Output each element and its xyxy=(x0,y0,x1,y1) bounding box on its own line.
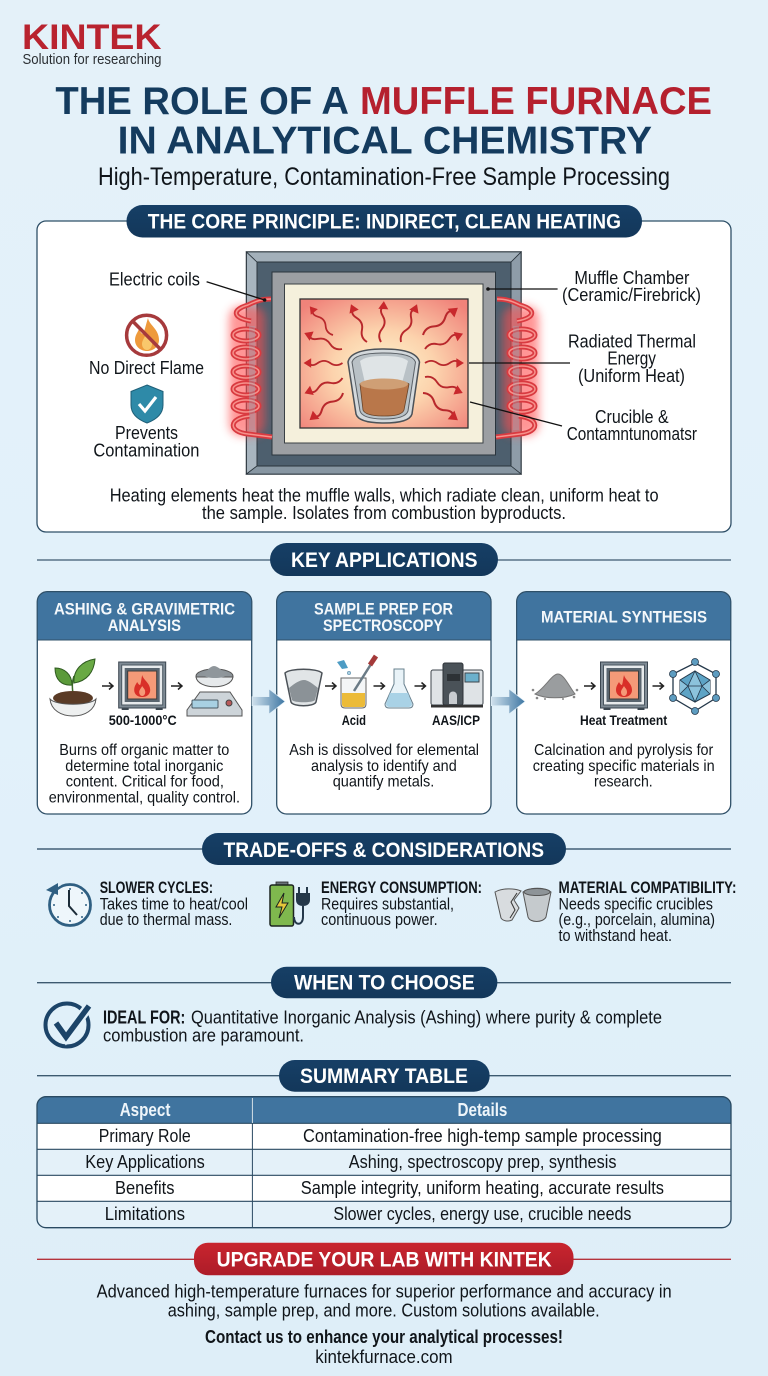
table row: limitations: Slower cycles, energy use, crucible needs xyxy=(333,1204,631,1224)
table row: primary role: Primary Role xyxy=(99,1126,191,1146)
heading: summary table xyxy=(37,1060,731,1092)
label: heat treatment: Heat Treatment xyxy=(580,712,668,728)
label: radiated thermal energy: (Uniform Heat) xyxy=(578,366,685,386)
icon: no direct flame xyxy=(127,315,167,355)
text: material synthesis description: research. xyxy=(594,774,653,791)
label: radiated thermal energy: Energy xyxy=(607,348,656,368)
arrow: step xyxy=(652,682,664,690)
icon: crucible with sample xyxy=(348,349,420,423)
icon: left heating coil xyxy=(233,299,272,437)
text: ashing description: environmental, quality control. xyxy=(49,790,240,807)
text: energy consumption xyxy=(321,878,482,929)
trade-off: material compatibility xyxy=(495,878,736,945)
table row: limitations: Limitations xyxy=(105,1204,185,1224)
heading: trade-offs and considerations: TRADE-OFFS & CONSIDERATIONS xyxy=(224,838,544,862)
table row: primary role: Contamination-free high-temp sample processing xyxy=(303,1126,662,1146)
trade-off: energy consumption xyxy=(270,878,482,929)
text: ideal for: combustion are paramount. xyxy=(103,1026,304,1046)
text: ashing description: content. Critical for food, xyxy=(66,774,224,791)
label: prevents contamination: Contamination xyxy=(93,440,199,460)
label: AAS/ICP: AAS/ICP xyxy=(432,712,480,728)
icon: plant in bowl xyxy=(50,659,96,716)
panel: ashing and gravimetric analysis xyxy=(37,592,252,814)
text: material compatibility: (e.g., porcelain, alumina) xyxy=(558,910,715,929)
title: IN ANALYTICAL CHEMISTRY xyxy=(118,120,652,162)
heading: when to choose: WHEN TO CHOOSE xyxy=(294,970,475,994)
arrow: step xyxy=(414,682,426,690)
text: slower cycles: due to thermal mass. xyxy=(100,910,232,929)
heading: the core principle xyxy=(126,205,642,238)
table row: benefits xyxy=(115,1178,664,1198)
label: crucible: Contamntunomatsr xyxy=(567,424,697,444)
arrow: step xyxy=(374,682,384,690)
label: prevents contamination: Prevents xyxy=(115,423,178,443)
text: slower cycles: Takes time to heat/cool xyxy=(100,894,248,913)
icon: AAS/ICP instrument xyxy=(431,663,483,708)
arrows: radiated heat xyxy=(302,301,465,425)
label: prevents contamination xyxy=(93,423,199,460)
label: no direct flame: No Direct Flame xyxy=(89,358,204,378)
title: THE ROLE OF A xyxy=(55,80,349,123)
card header: material synthesis xyxy=(517,592,731,640)
label: radiated thermal energy: Radiated Thermal xyxy=(568,332,696,352)
subtitle: High-Temperature, Contamination-Free Sample Processing xyxy=(98,163,670,191)
table: summary xyxy=(37,1097,731,1228)
table header: Aspect xyxy=(120,1100,170,1120)
arrow: sample prep to synthesis xyxy=(491,689,525,714)
panel: sample prep for spectroscopy xyxy=(277,592,491,814)
heading: summary table: SUMMARY TABLE xyxy=(300,1064,468,1088)
card header: ashing xyxy=(37,592,252,640)
heading: upgrade your lab: UPGRADE YOUR LAB WITH KINTEK xyxy=(217,1248,552,1272)
arrow: step xyxy=(584,682,595,690)
caption: core principle: the sample. Isolates from combustion byproducts. xyxy=(202,503,566,523)
heading: key applications: KEY APPLICATIONS xyxy=(291,548,478,572)
text: sample prep description: analysis to identify and xyxy=(311,758,457,775)
text: material compatibility: Needs specific crucibles xyxy=(558,894,713,913)
text: slower cycles: SLOWER CYCLES: xyxy=(100,878,213,897)
card header: ashing: ANALYSIS xyxy=(108,616,181,635)
text: contact xyxy=(205,1327,563,1367)
heading: the core principle: THE CORE PRINCIPLE: INDIRECT, CLEAN HEATING xyxy=(148,210,621,234)
text: call to action xyxy=(97,1282,672,1321)
logo: KINTEK: KINTEK xyxy=(22,18,162,57)
icon: furnace xyxy=(600,662,648,710)
card header: sample prep: SAMPLE PREP FOR xyxy=(314,599,453,618)
heading: upgrade your lab xyxy=(37,1243,731,1275)
trade-off: slower cycles xyxy=(46,878,248,929)
table header xyxy=(120,1100,507,1120)
title: MUFFLE FURNACE xyxy=(360,80,712,123)
text: energy consumption: Requires substantial, xyxy=(321,894,454,913)
label: electric coils: Electric coils xyxy=(109,270,200,290)
title xyxy=(55,80,712,162)
card header: sample prep: SPECTROSCOPY xyxy=(323,616,444,635)
text: contact: kintekfurnace.com xyxy=(315,1347,453,1367)
icon: powder pile xyxy=(532,674,578,700)
icon: flask xyxy=(385,669,413,708)
table header: Details xyxy=(458,1100,507,1120)
arrow: step xyxy=(102,682,113,690)
text: energy consumption: ENERGY CONSUMPTION: xyxy=(321,878,482,897)
text: ideal for: IDEAL FOR: xyxy=(103,1007,185,1027)
table row: limitations xyxy=(105,1204,631,1224)
label: acid: Acid xyxy=(342,712,366,728)
heading: key applications xyxy=(37,543,731,576)
text: ashing description: Burns off organic matter to xyxy=(59,742,229,759)
arrow: ashing to sample prep xyxy=(252,689,285,714)
text: material synthesis description: Calcination and pyrolysis for xyxy=(534,742,714,759)
text: energy consumption: continuous power. xyxy=(321,910,438,929)
text: contact: Contact us to enhance your analytical processes! xyxy=(205,1327,563,1347)
text: sample prep description: Ash is dissolved for elemental xyxy=(289,742,479,759)
card header: sample prep xyxy=(277,592,491,640)
label: temperature: 500-1000°C xyxy=(109,712,177,728)
label: electric coils xyxy=(109,270,266,302)
text: ashing description xyxy=(49,742,240,807)
label: muffle chamber: (Ceramic/Firebrick) xyxy=(562,285,701,305)
table row: key applications: Ashing, spectroscopy prep, synthesis xyxy=(349,1152,616,1172)
text: material compatibility xyxy=(558,878,736,945)
arrow: step xyxy=(171,682,182,690)
label: radiated thermal energy xyxy=(469,332,696,386)
logo: KINTEK: Solution for researching xyxy=(22,51,162,68)
label: muffle chamber: Muffle Chamber xyxy=(574,268,689,288)
panel: material synthesis xyxy=(517,592,731,814)
table row: key applications: Key Applications xyxy=(85,1152,205,1172)
icon: furnace xyxy=(119,662,166,710)
card header: ashing: ASHING & GRAVIMETRIC xyxy=(54,599,235,618)
heading: trade-offs and considerations xyxy=(37,833,731,865)
text: call to action: ashing, sample prep, and more. Custom solutions available. xyxy=(168,1301,600,1321)
text: slower cycles xyxy=(100,878,248,929)
panel: core principle xyxy=(37,205,731,532)
icon: cracked and intact crucibles xyxy=(495,888,551,922)
arrow: step xyxy=(325,682,336,690)
icon: beaker with acid and dropper xyxy=(337,656,376,708)
text: material synthesis description: creating specific materials in xyxy=(533,758,715,775)
icon: shield xyxy=(131,385,163,423)
text: sample prep description: quantify metals. xyxy=(333,774,434,791)
table row: benefits: Sample integrity, uniform heating, accurate results xyxy=(301,1178,664,1198)
text: material synthesis description xyxy=(533,742,715,791)
caption: core principle: Heating elements heat the muffle walls, which radiate clean, uniform heat to xyxy=(110,486,659,506)
icon: check mark xyxy=(46,1004,89,1046)
heading: when to choose xyxy=(37,967,731,998)
text: ashing description: determine total inorganic xyxy=(65,758,223,775)
text: ideal for xyxy=(103,1007,662,1046)
icon: glow of electric coils xyxy=(229,306,539,436)
text: material compatibility: to withstand heat. xyxy=(558,926,672,945)
label: muffle chamber xyxy=(486,268,701,305)
icon: right heating coil xyxy=(496,299,535,437)
icon: crystal lattice xyxy=(670,658,720,714)
label: crucible: Crucible & xyxy=(595,407,669,427)
table row: key applications xyxy=(85,1152,617,1172)
table row: benefits: Benefits xyxy=(115,1178,174,1198)
icon: clock xyxy=(46,883,90,926)
table row: primary role xyxy=(99,1126,662,1146)
text: ideal for: Quantitative Inorganic Analysis (Ashing) where purity & complete xyxy=(191,1007,662,1027)
icon: weighing scale xyxy=(187,666,242,716)
caption: core principle xyxy=(110,486,659,523)
diagram: muffle furnace cross-section xyxy=(229,252,539,474)
text: call to action: Advanced high-temperature furnaces for superior performance and accuracy in xyxy=(97,1282,672,1302)
icon: crucible with ash xyxy=(285,669,322,706)
card header: material synthesis: MATERIAL SYNTHESIS xyxy=(541,608,707,627)
text: sample prep description xyxy=(289,742,479,791)
label: crucible xyxy=(470,402,697,444)
icon: battery and plug xyxy=(270,882,310,926)
